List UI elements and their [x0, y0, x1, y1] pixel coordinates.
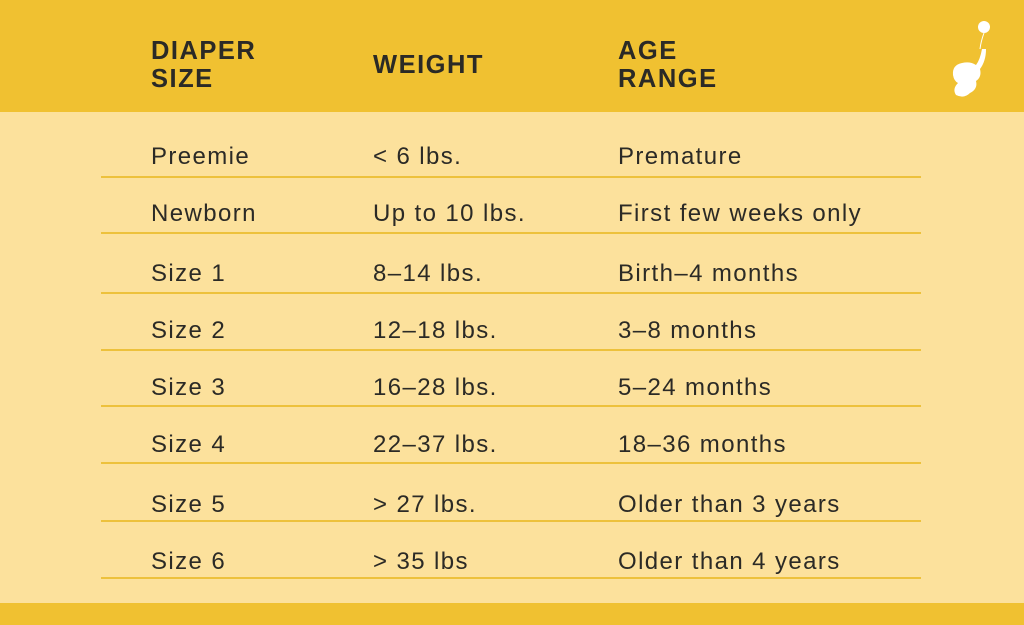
text: Size 1	[151, 260, 226, 287]
text: Newborn	[151, 200, 257, 227]
text: 3–8 months	[618, 317, 757, 344]
text: 18–36 months	[618, 431, 787, 458]
text: Older than 4 years	[618, 548, 841, 575]
text: Size 4	[151, 431, 226, 458]
text: 8–14 lbs.	[373, 260, 483, 287]
heading: weight: WEIGHT	[373, 51, 484, 79]
heading: diaper size: DIAPER	[151, 37, 256, 65]
table rows: Preemie	[151, 143, 250, 170]
heading: age range: AGE	[618, 37, 678, 65]
text: 22–37 lbs.	[373, 431, 498, 458]
text: 12–18 lbs.	[373, 317, 498, 344]
icon: elephant with balloon	[952, 21, 990, 97]
table rows: Premature	[618, 143, 743, 170]
header band	[0, 0, 1024, 112]
text: 5–24 months	[618, 374, 772, 401]
heading: age range	[618, 37, 718, 93]
heading: age range: RANGE	[618, 65, 718, 93]
text: Size 5	[151, 491, 226, 518]
footer band	[0, 603, 1024, 625]
text: Older than 3 years	[618, 491, 841, 518]
text: > 35 lbs	[373, 548, 469, 575]
text: Birth–4 months	[618, 260, 799, 287]
heading: diaper size	[151, 37, 256, 93]
text: First few weeks only	[618, 200, 862, 227]
text: Size 6	[151, 548, 226, 575]
text: Size 3	[151, 374, 226, 401]
heading: diaper size: SIZE	[151, 65, 214, 93]
text: Up to 10 lbs.	[373, 200, 526, 227]
text: Size 2	[151, 317, 226, 344]
text: 16–28 lbs.	[373, 374, 498, 401]
text: > 27 lbs.	[373, 491, 477, 518]
table rows: < 6 lbs.	[373, 143, 462, 170]
table rows	[151, 143, 743, 170]
